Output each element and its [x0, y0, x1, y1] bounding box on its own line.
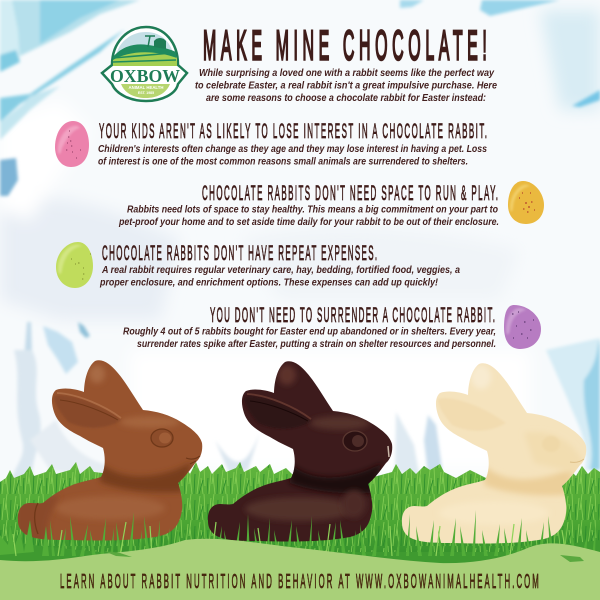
reason 3 text: proper enclosure, and enrichment options. These expenses can add up quickly!	[99, 278, 438, 288]
intro text: are some reasons to choose a chocolate rabbit for Easter instead:	[206, 93, 486, 104]
reason 2 text: Rabbits need lots of space to stay healthy. This means a big commitment on your part to	[127, 204, 499, 216]
title: MAKE MINE CHOCOLATE!	[203, 21, 487, 69]
intro text: While surprising a loved one with a rabbit seems like the perfect way	[199, 68, 495, 79]
logo tagline: ANIMAL HEALTH	[129, 85, 163, 90]
icon: purple egg	[504, 305, 541, 349]
reason 4 text	[123, 326, 496, 350]
milk chocolate bunny	[15, 360, 202, 545]
reason 3 heading: CHOCOLATE RABBITS DON'T HAVE REPEAT EXPENSES.	[102, 243, 377, 265]
footer text: LEARN ABOUT RABBIT NUTRITION AND BEHAVIOR AT WWW.OXBOWANIMALHEALTH.COM	[60, 571, 539, 593]
icon: pink egg	[55, 121, 89, 167]
icon: green egg	[56, 242, 93, 288]
logo: Oxbow Animal Health	[102, 27, 187, 101]
reason 4 text: surrender rates spike after Easter, putting a strain on shelter resources and personnel.	[137, 339, 496, 350]
reason 2 heading: CHOCOLATE RABBITS DON'T NEED SPACE TO RUN & PLAY.	[202, 183, 498, 205]
grass	[0, 462, 600, 565]
reason 2 text: pet-proof your home and to set aside time daily for your rabbit to be out of their enclosure.	[118, 217, 499, 228]
intro text	[195, 68, 497, 104]
intro text: to celebrate Easter, a real rabbit isn't a great impulsive purchase. Here	[195, 80, 497, 92]
footer band	[0, 539, 600, 600]
white chocolate bunny	[402, 363, 586, 544]
reason 1 heading: YOUR KIDS AREN'T AS LIKELY TO LOSE INTEREST IN A CHOCOLATE RABBIT.	[99, 121, 487, 143]
reason 4 text: Roughly 4 out of 5 rabbits bought for Easter end up abandoned or in shelters. Every year,	[123, 326, 496, 338]
logo wordmark: OXBOW	[110, 66, 180, 86]
reason 2 text	[118, 204, 499, 228]
logo established: EST. 1985	[138, 91, 154, 95]
icon: yellow egg	[508, 181, 544, 224]
foreground grass blades	[0, 510, 600, 575]
reason 3 text: A real rabbit requires regular veterinary care, hay, bedding, fortified food, veggies, a	[101, 265, 460, 276]
reason 1 text: of interest is one of the most common reasons small animals are surrendered to shelters.	[98, 156, 468, 168]
reason 1 text: Children's interests often change as they age and they may lose interest in having a pet. Loss	[98, 144, 487, 155]
reason 1 text	[98, 144, 487, 168]
dark chocolate bunny	[208, 361, 392, 542]
reason 4 heading: YOU DON'T NEED TO SURRENDER A CHOCOLATE RABBIT.	[210, 305, 495, 327]
reason 3 text	[99, 265, 460, 288]
